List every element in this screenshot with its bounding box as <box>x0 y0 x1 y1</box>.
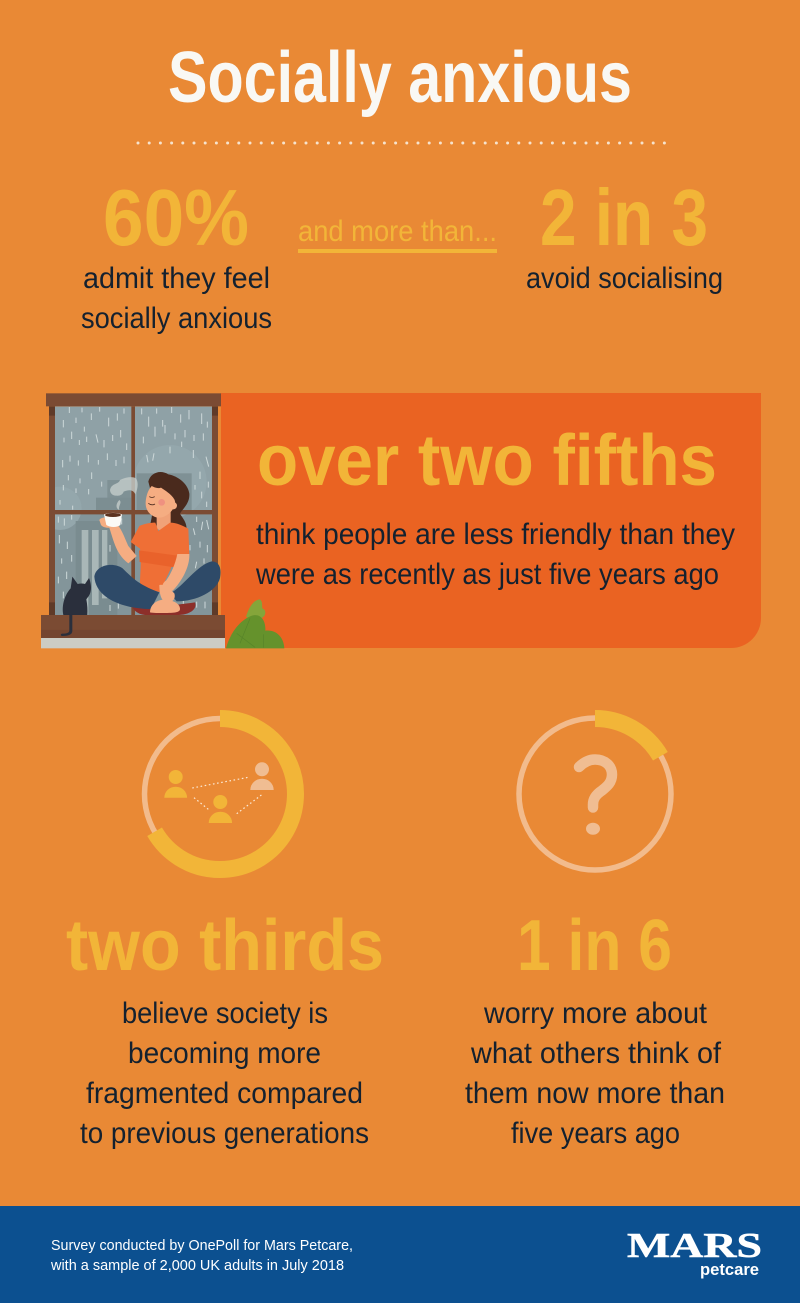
stat: two thirds: to previous generations <box>80 1117 369 1150</box>
panel text: were as recently as just five years ago <box>255 558 719 591</box>
stat: 1 in 6: 1 in 6 <box>517 906 672 986</box>
stat: 1 in 6: worry more about <box>483 997 708 1030</box>
icon: question mark <box>579 760 612 835</box>
sill <box>41 615 225 648</box>
window frame <box>46 393 221 615</box>
stat: two thirds: fragmented compared <box>86 1077 363 1110</box>
raised arm <box>108 523 137 563</box>
stat: 2 in 3 <box>526 173 723 295</box>
stat: two thirds: becoming more <box>128 1037 321 1070</box>
icon: people <box>164 762 274 823</box>
plant <box>226 599 284 648</box>
rain <box>58 407 209 611</box>
hair back <box>148 472 189 532</box>
title: Socially anxious <box>168 38 632 118</box>
panel text: think people are less friendly than they <box>256 518 735 551</box>
stat: 60%: 60% <box>103 173 249 262</box>
window glass <box>38 406 212 615</box>
logo: Mars Petcare <box>627 1226 762 1279</box>
survey note: Survey conducted by OnePoll for Mars Petcare, <box>51 1237 353 1254</box>
stat: 60%: socially anxious <box>81 302 272 335</box>
stat: 1 in 6 <box>465 906 725 1150</box>
stat: 60% <box>81 173 272 335</box>
ring chart: two thirds <box>144 718 296 870</box>
cat <box>61 577 91 636</box>
heading: over two fifths: over two fifths <box>257 421 717 501</box>
ring chart: 1 in 6 <box>519 718 671 870</box>
survey note <box>50 1237 353 1274</box>
stat: 1 in 6: them now more than <box>465 1077 725 1110</box>
stat: 1 in 6: five years ago <box>511 1117 680 1150</box>
steam <box>110 477 138 510</box>
connector: and more than: and more than... <box>298 215 497 248</box>
panel: over two fifths <box>221 393 761 648</box>
stat: two thirds: believe society is <box>122 997 328 1030</box>
stat: two thirds: two thirds <box>66 906 384 986</box>
illustration: woman on window sill with cat <box>38 393 284 648</box>
stat: 2 in 3: 2 in 3 <box>540 173 708 262</box>
hair front <box>149 481 180 504</box>
cushion <box>132 602 196 615</box>
stat: 1 in 6: what others think of <box>470 1037 722 1070</box>
survey note: with a sample of 2,000 UK adults in July 2018 <box>50 1257 344 1274</box>
feet and hand <box>150 600 180 613</box>
stat: 60%: admit they feel <box>83 262 270 295</box>
shirt <box>131 523 189 592</box>
logo: Mars Petcare: petcare <box>700 1260 759 1279</box>
stat: 2 in 3: avoid socialising <box>526 262 723 295</box>
woman <box>94 472 221 615</box>
left arm <box>162 554 189 592</box>
cup <box>104 513 122 527</box>
legs <box>94 565 159 609</box>
logo: Mars Petcare: MARS <box>627 1226 762 1265</box>
panel text <box>255 518 735 591</box>
stat: two thirds <box>66 906 384 1150</box>
footer <box>0 1206 800 1303</box>
neck and face <box>157 512 171 530</box>
